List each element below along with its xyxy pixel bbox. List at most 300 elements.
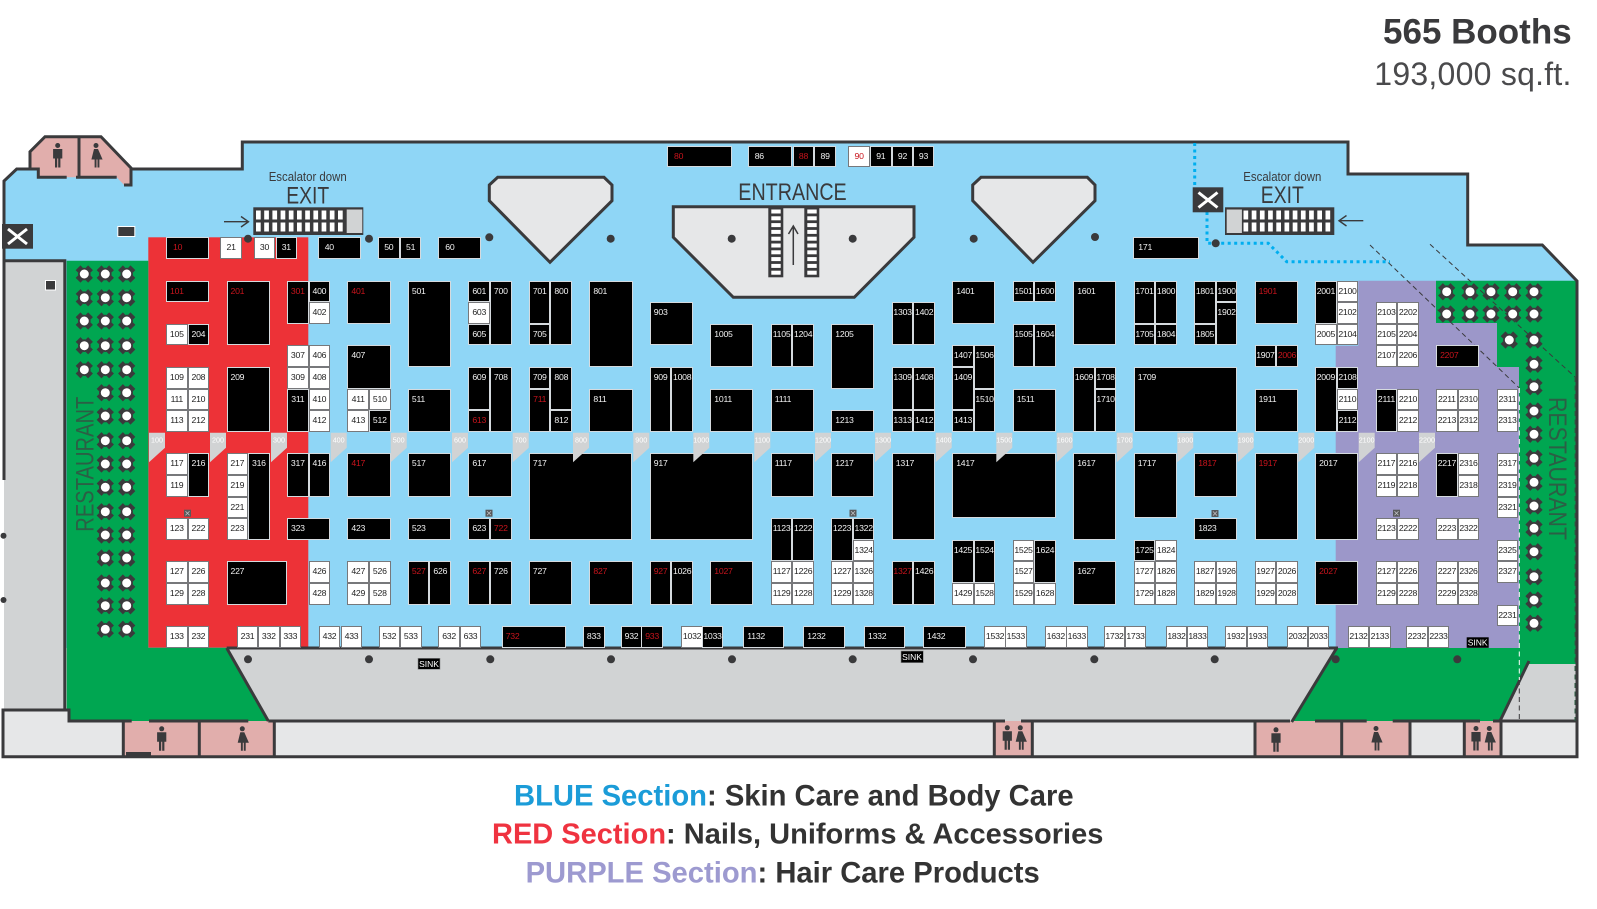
booth column 300: 323 xyxy=(291,523,305,533)
booth column 300: 402 xyxy=(313,307,326,317)
aisle number markers: 1600 xyxy=(1057,436,1073,444)
booth column 2300: 2311 xyxy=(1499,394,1516,404)
booth column 600: 609 xyxy=(472,372,486,382)
booth column 1600: 1601 xyxy=(1077,286,1096,296)
booth column 900: 909 xyxy=(654,372,667,382)
booth column 1800: 1801 xyxy=(1196,286,1214,296)
booth column 2300: 2325 xyxy=(1498,545,1517,555)
booth column 1900 xyxy=(1255,281,1298,605)
booth column 600: 603 xyxy=(472,307,486,317)
booth column 100: 127 xyxy=(170,566,184,576)
aisle number markers: 1500 xyxy=(996,436,1012,444)
booth column 400: 413 xyxy=(351,415,365,425)
booth column 700: 705 xyxy=(533,329,547,339)
booth column 300 xyxy=(287,281,330,605)
booth column 1200: 1324 xyxy=(855,545,873,555)
left restaurant label: RESTAURANT xyxy=(71,397,99,532)
booth column 1200: 1322 xyxy=(855,523,873,533)
booth column 600 xyxy=(468,281,512,605)
booth column 700: 717 xyxy=(533,458,547,468)
booth column 1400: 1506 xyxy=(975,350,994,360)
booth column 1100: 1117 xyxy=(775,458,792,468)
booth column 2100: 2129 xyxy=(1377,588,1396,598)
booth column 1900: 1911 xyxy=(1259,394,1276,404)
booth column 1400: 1413 xyxy=(954,415,972,425)
booth column 1800: 1827 xyxy=(1196,566,1214,576)
booth column 2200: 2310 xyxy=(1459,394,1478,404)
booth column 1100: 1226 xyxy=(794,566,812,576)
left exit label: EXIT xyxy=(286,182,329,209)
booth column 300: 408 xyxy=(313,372,326,382)
left hex planter xyxy=(489,177,612,262)
booth column 1800: 1902 xyxy=(1217,307,1236,317)
booth column 700: 800 xyxy=(554,286,568,296)
booth column 1000: 1027 xyxy=(714,566,733,576)
aisle number markers: 200 xyxy=(212,436,224,444)
legend: blue section: BLUE Section: Skin Care and Body Care xyxy=(514,780,1074,812)
booth column 2200: 2207 xyxy=(1440,350,1458,360)
booth column 200: 201 xyxy=(230,286,244,296)
booth column 300: 301 xyxy=(291,286,305,296)
icon: left closed exit xyxy=(2,224,33,249)
booth column 900 xyxy=(650,302,753,605)
booth column 900: 1008 xyxy=(673,372,691,382)
booth column 1400 xyxy=(952,281,1056,605)
booth column 1300: 1408 xyxy=(915,372,933,382)
booth column 1200 xyxy=(831,324,874,605)
booth column 2200: 2217 xyxy=(1438,458,1456,468)
bottom row booths: 1933 xyxy=(1248,631,1267,641)
bottom row booths: 732 xyxy=(506,631,519,641)
booth column 2100: 2107 xyxy=(1377,350,1396,360)
booth column 2100: 2226 xyxy=(1399,566,1417,576)
booth column 1900: 2006 xyxy=(1278,350,1296,360)
booth column 1400: 1425 xyxy=(954,545,972,555)
aisle number markers: 400 xyxy=(333,436,345,444)
booth column 100: 129 xyxy=(170,588,184,598)
aisle number markers: 1800 xyxy=(1177,436,1193,444)
booth column 600: 601 xyxy=(472,286,486,296)
booth column 2200: 2326 xyxy=(1459,566,1478,576)
booth column 1800 xyxy=(1194,281,1237,605)
left escalator label: Escalator down xyxy=(269,170,347,184)
bottom row booths: 1432 xyxy=(927,631,945,641)
booth column 1100: 1105 xyxy=(773,329,790,339)
booth column 1300: 1327 xyxy=(893,566,912,576)
aisle number markers: 300 xyxy=(273,436,285,444)
booths 10 to 60: 40 xyxy=(325,242,334,252)
top booths 80 to 93: 80 xyxy=(674,151,683,161)
aisle number markers: 1200 xyxy=(815,436,831,444)
booth column 900: 1026 xyxy=(673,566,691,576)
booth column 200: 227 xyxy=(230,566,244,576)
booth column 200 xyxy=(227,281,287,605)
booth column 1300: 1402 xyxy=(915,307,933,317)
booth column 1500: 1501 xyxy=(1014,286,1033,296)
booth column 1700: 1717 xyxy=(1138,458,1156,468)
booth column 2100: 2202 xyxy=(1399,307,1417,317)
arrow: left exit xyxy=(224,216,248,227)
booth column 400: 407 xyxy=(351,350,365,360)
booth column 1900: 2028 xyxy=(1278,588,1296,598)
bottom row booths: 2233 xyxy=(1429,631,1448,641)
booth column 2100: 2222 xyxy=(1399,523,1417,533)
top booths 80 to 93: 89 xyxy=(820,151,830,161)
bottom row booths: 1533 xyxy=(1007,631,1025,641)
booth column 2300: 2231 xyxy=(1498,610,1517,620)
booth column 2100: 2111 xyxy=(1378,394,1395,404)
booth column 300: 311 xyxy=(291,394,304,404)
booth column 2000: 2110 xyxy=(1339,394,1356,404)
booth column 600: 627 xyxy=(472,566,486,576)
booth column 2100: 2103 xyxy=(1377,307,1396,317)
bottom row booths: 1232 xyxy=(807,631,826,641)
booth column 600: 623 xyxy=(472,523,486,533)
booth column 2300: 2321 xyxy=(1498,502,1517,512)
aisle number markers: 1000 xyxy=(693,436,709,444)
aisle number markers: 700 xyxy=(515,436,527,444)
bottom row booths: 2132 xyxy=(1349,631,1368,641)
booth column 1700: 1709 xyxy=(1138,372,1156,382)
arrow: entrance up xyxy=(788,226,798,265)
icon: right closed exit xyxy=(1193,187,1223,212)
booth column 200: 217 xyxy=(230,458,244,468)
bottom row booths: 332 xyxy=(262,631,276,641)
booth column 600: 708 xyxy=(494,372,508,382)
entrance platform xyxy=(673,207,914,297)
booth column 400: 512 xyxy=(373,415,387,425)
booth column 500: 626 xyxy=(433,566,447,576)
booth column 1700: 1729 xyxy=(1135,588,1154,598)
bottom row booths: 2032 xyxy=(1288,631,1307,641)
top booths 80 to 93: 88 xyxy=(799,151,808,161)
booth column 700: 812 xyxy=(554,415,568,425)
booths 10 to 60: 60 xyxy=(445,242,454,252)
booth column 600: 722 xyxy=(494,523,508,533)
booth column 2200: 2312 xyxy=(1459,415,1478,425)
restroom icons xyxy=(53,143,1496,752)
aisle number markers: 1400 xyxy=(936,436,952,444)
booth column 2100: 2105 xyxy=(1377,329,1396,339)
booth column 1200: 1205 xyxy=(835,329,854,339)
booth column 800: 827 xyxy=(593,566,607,576)
booth column 1800: 1829 xyxy=(1196,588,1214,598)
booth column 1300: 1313 xyxy=(893,415,912,425)
booth column 1200: 1229 xyxy=(833,588,851,598)
booth column 100: 111 xyxy=(171,394,183,404)
bottom row booths: 1732 xyxy=(1105,631,1124,641)
booth column 600: 726 xyxy=(494,566,508,576)
booth column 100: 117 xyxy=(170,458,183,468)
booth column 2100: 2127 xyxy=(1377,566,1396,576)
booth column 100: 210 xyxy=(192,394,205,404)
booth column 600: 605 xyxy=(472,329,486,339)
booth column 1700 xyxy=(1134,281,1237,605)
booth column 1300: 1309 xyxy=(893,372,912,382)
entrance label: ENTRANCE xyxy=(738,179,847,206)
booth 171: 171 xyxy=(1138,242,1152,252)
booth column 1500: 1624 xyxy=(1036,545,1054,555)
booth column 2100: 2216 xyxy=(1399,458,1417,468)
bottom row booths: 1033 xyxy=(703,631,722,641)
top booths 80 to 93: 93 xyxy=(919,151,928,161)
blue section floor xyxy=(4,142,1577,648)
booth column 1100: 1204 xyxy=(794,329,812,339)
right restaurant floor xyxy=(1292,281,1577,722)
booth column 1200: 1217 xyxy=(835,458,854,468)
right restaurant label: RESTAURANT xyxy=(1543,397,1571,540)
bottom row booths: 1332 xyxy=(868,631,886,641)
booth column 500: 527 xyxy=(412,566,426,576)
booth column 2100: 2204 xyxy=(1399,329,1417,339)
booth column 1800: 1900 xyxy=(1217,286,1236,296)
booth column 200: 223 xyxy=(230,523,244,533)
booth column 100: 216 xyxy=(192,458,205,468)
aisle number markers: 1300 xyxy=(875,436,891,444)
booth column 400: 411 xyxy=(352,394,365,404)
booth column 1400: 1407 xyxy=(954,350,972,360)
booth column 300: 307 xyxy=(291,350,305,360)
booth column 100: 119 xyxy=(170,480,183,490)
booth column 300: 416 xyxy=(313,458,326,468)
booth column 1600: 1708 xyxy=(1096,372,1115,382)
aisle number markers: 900 xyxy=(635,436,647,444)
aisle number markers: 2200 xyxy=(1419,436,1435,444)
booths 10 to 60: 51 xyxy=(406,242,415,252)
booth column 500: 501 xyxy=(412,286,426,296)
bottom row booths: 1532 xyxy=(986,631,1004,641)
booth column 1300: 1412 xyxy=(915,415,933,425)
bottom row booths: 231 xyxy=(241,631,254,641)
booth column 2000: 2108 xyxy=(1338,372,1357,382)
entrance stairs xyxy=(768,207,819,277)
booth column 1200: 1213 xyxy=(835,415,854,425)
bottom service strip xyxy=(3,710,1577,757)
booth column 100: 228 xyxy=(192,588,205,598)
pillars xyxy=(0,233,1461,663)
booth column 2100: 2218 xyxy=(1399,480,1417,490)
aisle number markers: 100 xyxy=(151,436,163,444)
booth column 2300: 2327 xyxy=(1498,566,1517,576)
floor area text: 193,000 sq.ft. xyxy=(1374,56,1572,92)
booth column 1100: 1222 xyxy=(794,523,812,533)
pink restroom areas xyxy=(30,137,1501,757)
booths 10 to 60 xyxy=(166,237,481,259)
booth column 300: 317 xyxy=(291,458,305,468)
booth column 1200: 1223 xyxy=(833,523,851,533)
booth column 900: 917 xyxy=(654,458,668,468)
booths 10 to 60: 10 xyxy=(173,242,182,252)
left escalator xyxy=(253,207,363,235)
booth column 2000: 2102 xyxy=(1338,307,1357,317)
bottom row booths: 1932 xyxy=(1227,631,1245,641)
booth column 1100: 1111 xyxy=(775,394,791,404)
right escalator xyxy=(1225,207,1334,235)
booth column 300: 428 xyxy=(313,588,326,598)
booth column 1000: 1005 xyxy=(714,329,733,339)
booth column 1600: 1627 xyxy=(1077,566,1096,576)
booth column 1700: 1701 xyxy=(1135,286,1154,296)
legend xyxy=(492,780,1103,889)
booth column 1500: 1604 xyxy=(1036,329,1054,339)
booth column 1700: 1828 xyxy=(1157,588,1175,598)
booth column 2000: 2017 xyxy=(1319,458,1337,468)
booth column 1400: 1417 xyxy=(956,458,975,468)
booth column 2200: 2316 xyxy=(1459,458,1478,468)
booth column 200: 221 xyxy=(230,502,244,512)
booth column 2100: 2123 xyxy=(1377,523,1396,533)
red section floor xyxy=(148,237,308,648)
booth column 1600: 1617 xyxy=(1077,458,1096,468)
booth column 1300: 1303 xyxy=(893,307,912,317)
booth column 200: 316 xyxy=(252,458,266,468)
legend: red section: RED Section: Nails, Uniforms & Accessories xyxy=(492,818,1103,850)
booth column 100: 212 xyxy=(192,415,205,425)
booth column 2000: 2104 xyxy=(1338,329,1357,339)
booth column 1500: 1505 xyxy=(1014,329,1033,339)
top booths 80 to 93: 92 xyxy=(898,151,907,161)
booth column 100: 101 xyxy=(170,286,184,296)
bottom row booths: 1733 xyxy=(1126,631,1145,641)
booth column 400: 417 xyxy=(351,458,365,468)
booth column 2100: 2210 xyxy=(1399,394,1417,404)
booth column 2100: 2228 xyxy=(1399,588,1417,598)
booth column 1700: 1705 xyxy=(1135,329,1154,339)
booth column 300: 426 xyxy=(313,566,326,576)
booth column 1600: 1609 xyxy=(1075,372,1093,382)
booth column 200: 209 xyxy=(230,372,244,382)
top booths 80 to 93: 91 xyxy=(876,151,885,161)
bottom row booths: 933 xyxy=(645,631,659,641)
booth column 800: 801 xyxy=(593,286,607,296)
sink labels xyxy=(418,637,1489,669)
right restaurant tables xyxy=(1438,283,1543,632)
left restaurant tables xyxy=(76,265,135,638)
right exit label: EXIT xyxy=(1261,182,1304,209)
booth column 800 xyxy=(589,281,633,605)
booth column 100: 222 xyxy=(192,523,205,533)
booth column 2200: 2318 xyxy=(1459,480,1478,490)
bottom row booths: 1632 xyxy=(1047,631,1065,641)
booth column 400: 401 xyxy=(351,286,365,296)
right hex planter xyxy=(973,177,1095,262)
booth column 700: 711 xyxy=(533,394,546,404)
bottom row booths: 133 xyxy=(170,631,184,641)
booth column 2200: 2328 xyxy=(1459,588,1478,598)
bottom row booths xyxy=(166,626,1449,648)
booth column 1400: 1409 xyxy=(954,372,972,382)
booth column 2000: 2027 xyxy=(1319,566,1337,576)
bottom row booths: 2033 xyxy=(1309,631,1328,641)
booth column 500: 517 xyxy=(412,458,426,468)
bottom row booths: 833 xyxy=(587,631,601,641)
booth column 1900: 1901 xyxy=(1259,286,1277,296)
booth column 1100: 1123 xyxy=(773,523,790,533)
purple section floor xyxy=(1336,281,1519,648)
booth column 400: 526 xyxy=(373,566,387,576)
bottom row booths: 632 xyxy=(442,631,456,641)
booth column 2300 xyxy=(1497,389,1518,626)
aisle number markers: 1100 xyxy=(755,436,770,444)
booth column 400: 528 xyxy=(373,588,387,598)
booth column 1800: 1817 xyxy=(1198,458,1217,468)
booth column 1600 xyxy=(1073,281,1116,605)
booth column 2200: 2223 xyxy=(1438,523,1456,533)
booth column 2100: 2117 xyxy=(1378,458,1395,468)
booth column 400 xyxy=(347,281,391,605)
booth column 300: 406 xyxy=(313,350,326,360)
booth column 100: 113 xyxy=(170,415,183,425)
booth column 1300 xyxy=(892,302,935,605)
booth column 1500: 1529 xyxy=(1014,588,1033,598)
booth column 1500: 1600 xyxy=(1036,286,1054,296)
booth column 700: 727 xyxy=(533,566,547,576)
booth column 2200: 2322 xyxy=(1459,523,1478,533)
booth column 500 xyxy=(408,281,451,605)
booth column 1700: 1826 xyxy=(1157,566,1175,576)
left gray corridor xyxy=(4,261,64,711)
top booths 80 to 93 xyxy=(667,146,934,167)
booth column 300: 309 xyxy=(291,372,305,382)
bottom row booths: 232 xyxy=(192,631,205,641)
booth column 400: 427 xyxy=(351,566,365,576)
booth column 500: 511 xyxy=(412,394,425,404)
booth column 100: 105 xyxy=(170,329,184,339)
booth column 2300: 2317 xyxy=(1498,458,1517,468)
booth column 2000: 2001 xyxy=(1317,286,1335,296)
booth column 1700: 1727 xyxy=(1135,566,1154,576)
booths 10 to 60: 50 xyxy=(384,242,393,252)
booth column 1800: 1928 xyxy=(1217,588,1236,598)
booth column 1500: 1511 xyxy=(1017,394,1034,404)
aisle number markers: 500 xyxy=(393,436,405,444)
booth column 1900: 1927 xyxy=(1256,566,1275,576)
booth column 1900: 2026 xyxy=(1278,566,1296,576)
booth column 1200: 1227 xyxy=(833,566,851,576)
bottom row booths: 2133 xyxy=(1371,631,1389,641)
booth column 1700: 1800 xyxy=(1157,286,1175,296)
booth column 1800: 1823 xyxy=(1198,523,1217,533)
booth column 1500: 1628 xyxy=(1036,588,1054,598)
booth column 2000: 2112 xyxy=(1339,415,1356,425)
booth column 100 xyxy=(166,281,209,605)
booth column 1700: 1824 xyxy=(1157,545,1175,555)
booth column 1100: 1228 xyxy=(794,588,812,598)
booths 10 to 60: 30 xyxy=(260,242,269,252)
booth column 1100: 1129 xyxy=(773,588,790,598)
booth column 1800: 1805 xyxy=(1196,329,1214,339)
bottom row booths: 532 xyxy=(382,631,396,641)
aisle number markers: 2100 xyxy=(1359,436,1375,444)
booth column 1800: 1926 xyxy=(1217,566,1236,576)
booth column 2000: 2009 xyxy=(1317,372,1335,382)
booth count heading: 565 Booths xyxy=(1383,12,1572,51)
booths 10 to 60: 31 xyxy=(282,242,291,252)
booth column 1400: 1429 xyxy=(954,588,972,598)
booth column 1900: 1917 xyxy=(1259,458,1277,468)
booth column 100: 123 xyxy=(170,523,184,533)
booth column 2200 xyxy=(1436,345,1479,605)
booth column 600: 700 xyxy=(494,286,508,296)
aisle number markers: 800 xyxy=(575,436,587,444)
booth column 2100: 2119 xyxy=(1378,480,1395,490)
aisle number markers: 600 xyxy=(454,436,466,444)
booth column 1700: 1804 xyxy=(1157,329,1175,339)
booth column 300: 400 xyxy=(313,286,326,296)
dashed ceiling lines xyxy=(1370,244,1575,721)
top booths 80 to 93: 90 xyxy=(854,151,864,161)
aisle number markers: 1700 xyxy=(1117,436,1133,444)
